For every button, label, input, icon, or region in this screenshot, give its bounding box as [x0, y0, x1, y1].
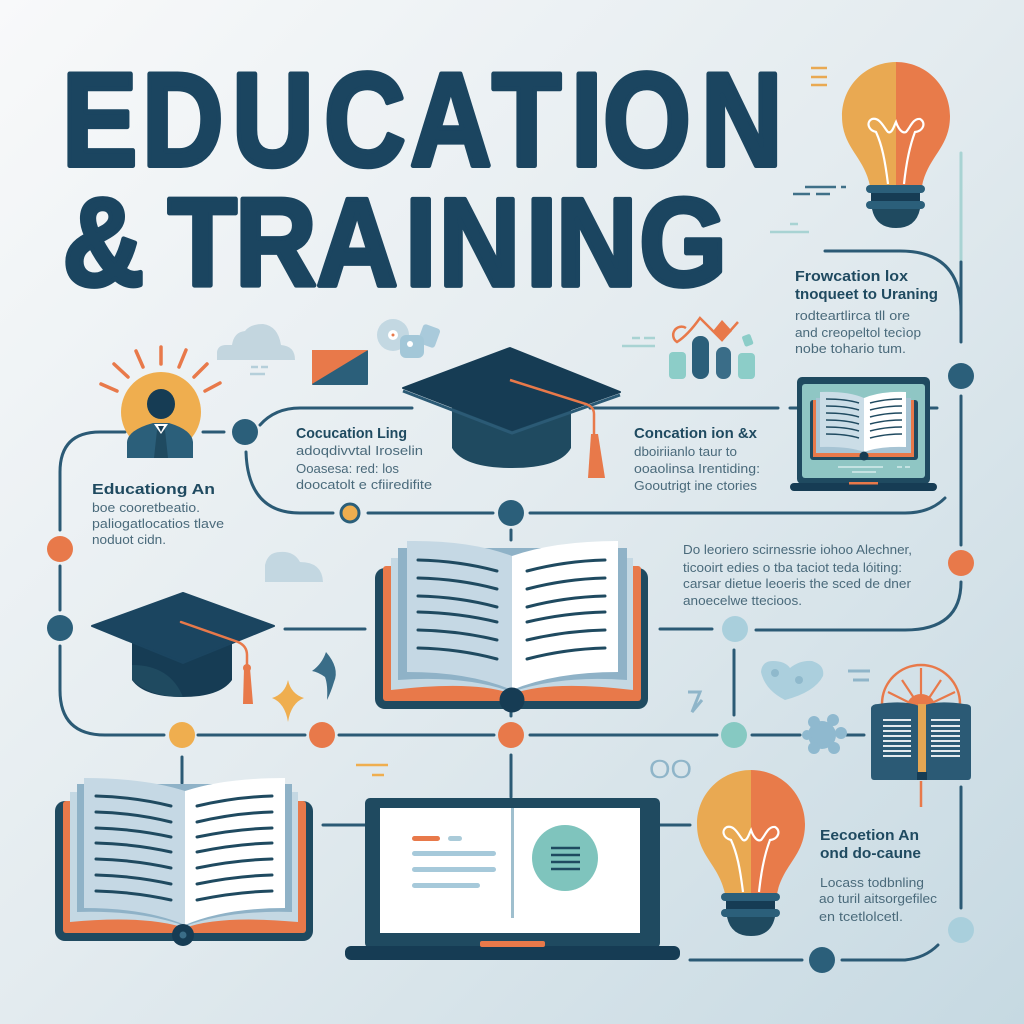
text block: bottom right: en tcetlolcetl. — [819, 909, 903, 924]
icon: gear cluster — [802, 714, 847, 754]
icon: bottom left open book — [55, 778, 313, 946]
text block: centre right: ooaolinsa Irentiding: — [634, 461, 760, 476]
text block: bottom right: ao turil aitsorgefilec — [819, 891, 938, 906]
text block: left: noduot cidn. — [92, 532, 166, 547]
text block: centre left: adoqdivvtal Iroselin — [296, 443, 423, 458]
text block: left: Educationg An — [92, 481, 215, 498]
icon: person with sun — [101, 347, 220, 458]
text block: centre left: Cocucation Ling — [296, 425, 407, 442]
text block: centre left — [296, 425, 432, 492]
text block: centre left: Ooasesa: red: los — [296, 461, 400, 476]
text block: top right: nobe tohario tum. — [795, 341, 906, 356]
connector lines — [60, 153, 961, 960]
icon: envelope card — [312, 350, 368, 385]
text block: centre right: dboiriianlo taur to — [634, 444, 737, 459]
text block: left: boe cooretbeatio. — [92, 500, 200, 515]
icon: dark book with sun wheel — [871, 665, 971, 807]
timeline nodes — [47, 363, 974, 973]
icon: bar chart with trend line — [622, 318, 755, 379]
icon: top light bulb — [842, 62, 950, 228]
text block: bottom right — [819, 827, 938, 924]
icon: teal squiggle — [688, 692, 702, 712]
dashes near heart — [848, 671, 870, 680]
text block: bottom right: Locass todbnling — [820, 875, 924, 890]
text block: middle paragraph: ticooirt edies o tba taciot teda lóiting: — [683, 560, 902, 575]
title — [62, 46, 783, 313]
text block: top right: Frowcation lox — [795, 268, 909, 285]
icon: cloud middle — [265, 552, 323, 582]
text block: top right: rodteartlirca tll ore — [795, 308, 910, 323]
text block: centre left: doocatolt e cfiiredifite — [296, 477, 432, 492]
text block: top right: and creopeltol tecìop — [795, 325, 921, 340]
icon: cloud top — [217, 324, 295, 360]
text block: left: paliogatlocatios tlave — [92, 516, 224, 531]
text block: top right — [795, 268, 938, 356]
icon: bottom light bulb — [697, 770, 805, 936]
text block: middle paragraph: Do leoriero scirnessrie iohoo Alechner, — [683, 542, 912, 557]
text block: top right: tnoqueet to Uraning — [795, 286, 938, 303]
icon: blue OO mark: OO — [649, 754, 692, 784]
icon: dark crescent — [312, 652, 336, 700]
icon: bottom laptop — [345, 798, 680, 960]
icon: centre open book — [375, 541, 648, 712]
icon: small graduation cap — [92, 593, 274, 704]
cloud dashes — [250, 367, 268, 374]
dashes near title — [770, 187, 846, 232]
text block: bottom right: ond do-caune — [820, 845, 921, 862]
icon: large graduation cap — [403, 348, 620, 478]
text block: left — [92, 481, 224, 547]
text block: middle paragraph: anoecelwe ttecioos. — [683, 593, 802, 608]
icon: laptop with book — [790, 377, 937, 491]
title: & TRAINING — [62, 173, 727, 313]
decorative dashes near top bulb — [811, 68, 827, 85]
title: EDUCATION — [62, 46, 783, 195]
icon: tech cluster — [377, 319, 441, 358]
text block: middle paragraph: carsar dietue leoeris the sced de dner — [683, 576, 912, 591]
icon: heart cluster — [761, 661, 823, 700]
text block: middle paragraph — [683, 542, 912, 608]
icon: gold sparkle — [272, 680, 304, 722]
text block: bottom right: Eecoetion An — [820, 827, 919, 844]
dashes near OO — [356, 765, 388, 775]
text block: centre right: Gooutrigt ine ctories — [634, 478, 758, 493]
text block: centre right — [634, 425, 760, 493]
text block: centre right: Concation ion &x — [634, 425, 758, 442]
